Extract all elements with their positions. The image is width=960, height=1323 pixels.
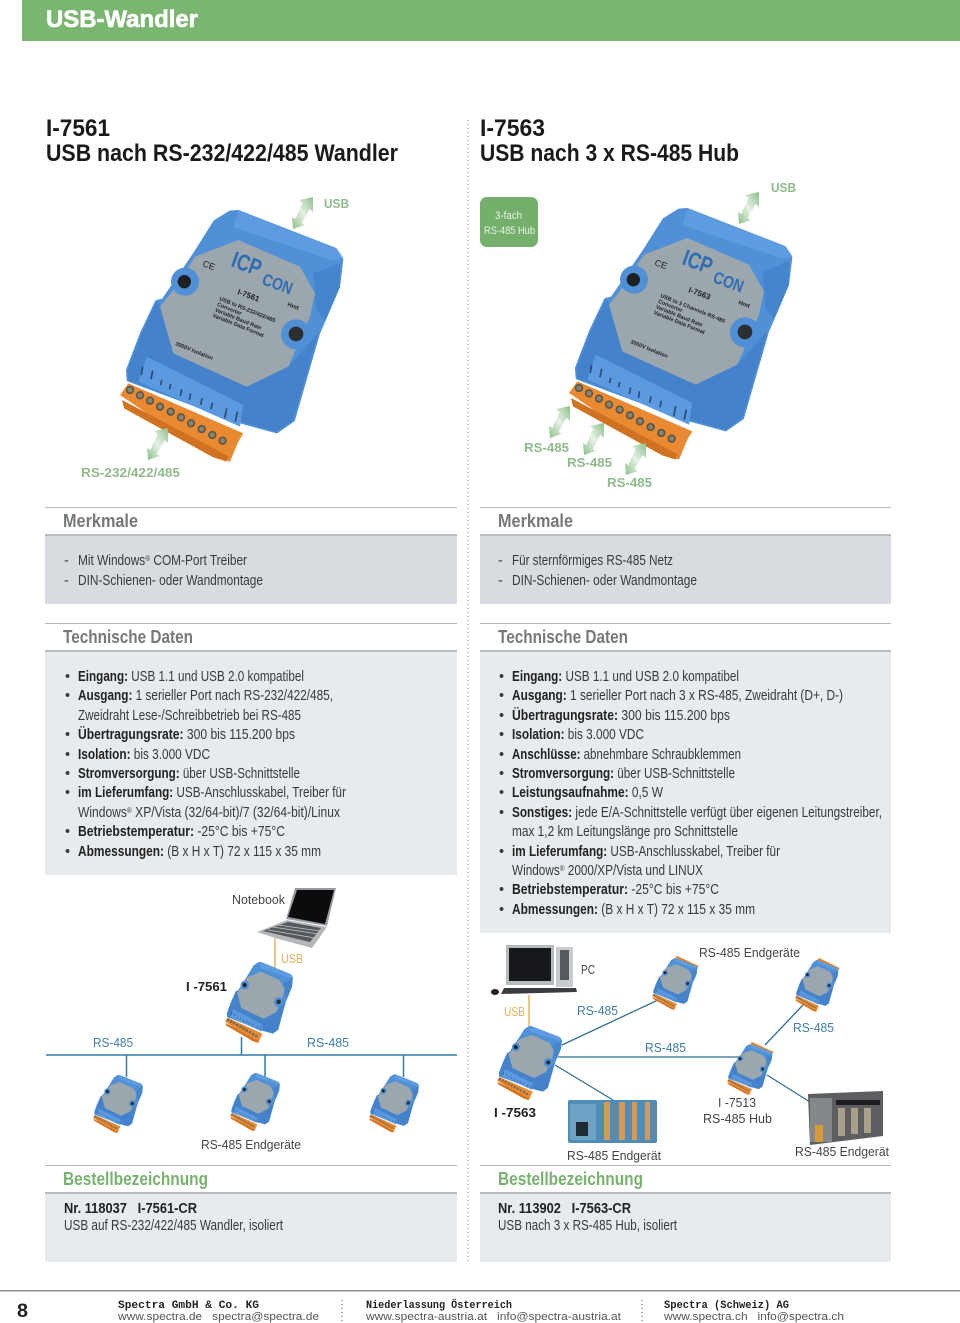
contact: Spectra GmbH: www.spectra.de spectra@spectra.de <box>117 1311 319 1323</box>
device photo I-7561: Hmt <box>286 302 299 312</box>
device photo I-7561: CON <box>260 270 295 298</box>
icon: RS-485 end device top right <box>795 958 840 1012</box>
device photo I-7561 <box>120 211 343 462</box>
device photo I-7563: Converter <box>657 299 684 314</box>
specification list: im Lieferumfang: USB-Anschlusskabel, Treiber für <box>512 844 780 860</box>
device photo I-7561: USB to RS-232/422/485 <box>218 296 276 324</box>
icon: RS-485 end device 2 <box>230 1073 280 1131</box>
specification list: im Lieferumfang: USB-Anschlusskabel, Treiber für <box>78 785 346 801</box>
labels: RS-485 links <box>577 1003 834 1055</box>
specification list: • <box>499 727 504 743</box>
label: USB: USB <box>281 951 303 966</box>
panel: Merkmale I-7561 <box>45 508 457 604</box>
specification list: • <box>65 688 70 704</box>
specification list: • <box>65 824 70 840</box>
device photo I-7561: I-7561 <box>236 287 261 304</box>
specification list: ® <box>127 806 132 815</box>
product title I-7561 <box>46 115 398 167</box>
device photo I-7563: USB to 3 Channels RS-485 <box>659 293 726 325</box>
label: RS-485 Endgerät left: RS-485 Endgerät <box>567 1148 661 1163</box>
specification list: • <box>65 844 70 860</box>
label: PC: PC <box>581 962 595 977</box>
specification list: Betriebstemperatur: -25°C bis +75°C <box>78 824 285 840</box>
label: USB: USB <box>771 180 796 195</box>
product title I-7561: I-7561 <box>46 115 110 142</box>
specification list: Windows <box>78 805 137 821</box>
feature list: - <box>498 553 503 569</box>
device photo I-7563: Variable Data Format <box>653 310 706 336</box>
contact: Spectra Schweiz <box>663 1300 844 1323</box>
specification list: • <box>499 805 504 821</box>
specification list: Eingang: USB 1.1 und USB 2.0 kompatibel <box>512 669 739 685</box>
heading: Technische Daten: Technische Daten <box>498 627 628 647</box>
badge: 3-fach RS-485 Hub <box>480 197 538 247</box>
device photo I-7563 <box>569 209 792 460</box>
page number: 8 <box>17 1301 28 1322</box>
labels: RS-485 ports: RS-485 <box>567 455 612 470</box>
contact: Spectra GmbH: Spectra GmbH & Co. KG <box>118 1300 259 1312</box>
specification list: Abmessungen: (B x H x T) 72 x 115 x 35 mm <box>512 902 755 918</box>
specification list: • <box>499 785 504 801</box>
specification list: • <box>499 747 504 763</box>
feature list: Mit Windows <box>78 553 160 569</box>
label: I-7513 RS-485 Hub: RS-485 Hub <box>703 1111 772 1126</box>
specification list: • <box>499 766 504 782</box>
specification list: Ausgang: 1 serieller Port nach RS-232/422/485, <box>78 688 333 704</box>
specification list: • <box>65 766 70 782</box>
label: RS-485 right: RS-485 <box>307 1035 349 1050</box>
labels: RS-485 ports <box>524 440 652 490</box>
feature list: DIN-Schienen- oder Wandmontage <box>512 573 697 589</box>
specification list: Übertragungsrate: 300 bis 115.200 bps <box>512 707 730 724</box>
page title: USB-Wandler <box>46 6 198 33</box>
specification list: Eingang: USB 1.1 und USB 2.0 kompatibel <box>78 669 304 685</box>
device photo I-7561: ICP <box>228 246 265 281</box>
label: I-7561: I -7561 <box>186 979 227 994</box>
heading: Merkmale: Merkmale <box>63 511 138 531</box>
product title I-7563: I-7563 <box>480 115 545 142</box>
arrow: RS-485 port 1 <box>549 406 570 438</box>
network diagram: I-7563 <box>491 945 889 1163</box>
device photo I-7563: CE <box>653 257 668 271</box>
feature list: Für sternförmiges RS-485 Netz <box>512 553 673 569</box>
labels: RS-485 links: RS-485 <box>577 1003 618 1018</box>
feature list: - <box>498 573 503 589</box>
feature list: - <box>64 553 69 569</box>
specification list: • <box>65 727 70 743</box>
arrow: RS-232/422/485 <box>147 428 168 460</box>
label: RS-232/422/485: RS-232/422/485 <box>81 465 180 480</box>
label: Notebook: Notebook <box>232 892 285 907</box>
arrow: USB I-7563 <box>738 192 759 224</box>
feature list: - <box>64 573 69 589</box>
specification list: Stromversorgung: über USB-Schnittstelle <box>512 766 735 782</box>
badge: 3-fach RS-485 Hub: 3-fach <box>495 210 522 222</box>
device photo I-7563: I-7563 <box>687 285 712 302</box>
contact: Spectra Schweiz: www.spectra.ch info@spectra.ch <box>663 1311 844 1323</box>
contact: Spectra GmbH <box>117 1300 319 1323</box>
labels: RS-485 links: RS-485 <box>645 1040 686 1055</box>
label: RS-485 Endgerät right: RS-485 Endgerät <box>795 1144 889 1159</box>
feature list: COM-Port Treiber <box>150 553 247 569</box>
feature list <box>64 553 263 589</box>
labels: RS-485 links: RS-485 <box>793 1020 834 1035</box>
specification list: Anschlüsse: abnehmbare Schraubklemmen <box>512 747 741 763</box>
order number: Nr. 113902 I-7563-CR <box>498 1201 631 1217</box>
feature list: DIN-Schienen- oder Wandmontage <box>78 573 263 589</box>
specification list: • <box>499 708 504 724</box>
icon: grey rack controller <box>808 1091 883 1145</box>
icon: RS-485 end device 1 <box>93 1075 143 1133</box>
device photo I-7563: Variable Baud Rate <box>655 304 703 329</box>
specification list: XP/Vista (32/64-bit)/7 (32/64-bit)/Linux <box>132 805 341 821</box>
panel: Technische Daten I-7561 <box>45 624 457 875</box>
specification list: • <box>499 844 504 860</box>
icon: PC <box>491 945 577 995</box>
specification list: • <box>499 669 504 685</box>
specification list: • <box>65 785 70 801</box>
icon: I-7563 module <box>497 1026 562 1100</box>
panel: Bestellbezeichnung I-7561 <box>45 1166 457 1262</box>
specification list: • <box>499 882 504 898</box>
specification list: Betriebstemperatur: -25°C bis +75°C <box>512 882 719 898</box>
network diagram: I-7561 <box>46 888 457 1152</box>
specification list <box>65 669 346 860</box>
arrow: RS-485 port 3 <box>625 443 646 475</box>
specification list: Stromversorgung: über USB-Schnittstelle <box>78 766 300 782</box>
icon: I-7513 hub <box>727 1042 774 1095</box>
product title I-7563: USB nach 3 x RS-485 Hub <box>480 140 739 167</box>
order number: Nr. 118037 I-7561-CR <box>64 1201 197 1217</box>
heading: Merkmale: Merkmale <box>498 511 573 531</box>
product title I-7563 <box>480 115 739 167</box>
panel: Bestellbezeichnung I-7563 <box>480 1166 891 1262</box>
labels: RS-485 ports: RS-485 <box>524 440 569 455</box>
specification list: Übertragungsrate: 300 bis 115.200 bps <box>78 726 295 743</box>
icon: RS-485 end device top <box>652 956 699 1010</box>
specification list: Windows <box>512 863 571 879</box>
specification list: • <box>65 747 70 763</box>
contact: Niederlassung Österreich: Niederlassung Österreich <box>366 1299 512 1312</box>
label: I-7513 RS-485 Hub: I -7513 <box>718 1095 756 1110</box>
product title I-7561: USB nach RS-232/422/485 Wandler <box>46 140 398 167</box>
device photo I-7561: 3000V Isolation <box>174 341 214 362</box>
heading: Bestellbezeichnung: Bestellbezeichnung <box>63 1169 208 1189</box>
specification list: • <box>499 902 504 918</box>
contact: Niederlassung Österreich <box>365 1299 621 1323</box>
order description: USB nach 3 x RS-485 Hub, isoliert <box>498 1218 677 1234</box>
header bar <box>22 0 960 41</box>
specification list: Abmessungen: (B x H x T) 72 x 115 x 35 mm <box>78 844 321 860</box>
device photo I-7561: Variable Data Format <box>212 313 265 339</box>
heading: Technische Daten: Technische Daten <box>63 627 193 647</box>
icon: notebook <box>257 888 336 948</box>
device photo I-7563: ICP <box>679 244 716 279</box>
order description: USB auf RS-232/422/485 Wandler, isoliert <box>64 1218 283 1234</box>
specification list: max 1,2 km Leitungslänge pro Schnittstelle <box>512 824 738 840</box>
icon: I-7561 module <box>225 962 293 1043</box>
specification list: Zweidraht Lese-/Schreibbetrieb bei RS-485 <box>78 708 301 724</box>
label: I-7563: I -7563 <box>494 1105 536 1120</box>
specification list: Sonstiges: jede E/A-Schnittstelle verfügt über eigenen Leitungstreiber, <box>512 805 882 821</box>
footer <box>0 1290 960 1323</box>
device photo I-7561: Converter <box>216 302 243 317</box>
specification list: • <box>65 669 70 685</box>
specification list: 2000/XP/Vista und LINUX <box>565 863 703 879</box>
label: USB: USB <box>504 1004 525 1019</box>
icon: blue rack controller <box>568 1100 657 1143</box>
device photo I-7563: Hmt <box>737 300 750 310</box>
specification list <box>499 669 882 918</box>
heading: Bestellbezeichnung: Bestellbezeichnung <box>498 1169 643 1189</box>
device photo I-7561: Variable Baud Rate <box>214 307 262 332</box>
label: USB: USB <box>324 196 349 211</box>
label: RS-485 Endgeräte: RS-485 Endgeräte <box>699 945 800 960</box>
device photo I-7561: CE <box>201 258 216 272</box>
feature list <box>498 553 697 589</box>
specification list: Leistungsaufnahme: 0,5 W <box>512 785 663 801</box>
device photo I-7563: CON <box>711 268 746 296</box>
panel: Technische Daten I-7563 <box>480 624 891 933</box>
contact: Spectra Schweiz: Spectra (Schweiz) AG <box>664 1300 789 1312</box>
arrow: RS-485 port 2 <box>583 423 604 455</box>
device photo I-7563: 3000V Isolation <box>629 339 669 360</box>
labels: RS-485 ports: RS-485 <box>607 475 652 490</box>
specification list: Isolation: bis 3.000 VDC <box>512 727 644 743</box>
arrow: USB I-7561 <box>292 197 313 229</box>
label: I-7513 RS-485 Hub <box>703 1095 772 1126</box>
label: RS-485 left: RS-485 <box>93 1035 133 1050</box>
panel: Merkmale I-7563 <box>480 508 891 604</box>
label: RS-485 Endgeräte: RS-485 Endgeräte <box>201 1137 301 1152</box>
feature list: ® <box>145 554 150 563</box>
specification list: ® <box>560 864 565 873</box>
badge: 3-fach RS-485 Hub: RS-485 Hub <box>484 225 535 237</box>
specification list: Ausgang: 1 serieller Port nach 3 x RS-485, Zweidraht (D+, D-) <box>512 688 843 704</box>
icon: RS-485 end device 3 <box>369 1075 419 1132</box>
specification list: • <box>499 688 504 704</box>
contact: Niederlassung Österreich: www.spectra-austria.at info@spectra-austria.at <box>365 1311 621 1323</box>
specification list: Isolation: bis 3.000 VDC <box>78 747 210 763</box>
